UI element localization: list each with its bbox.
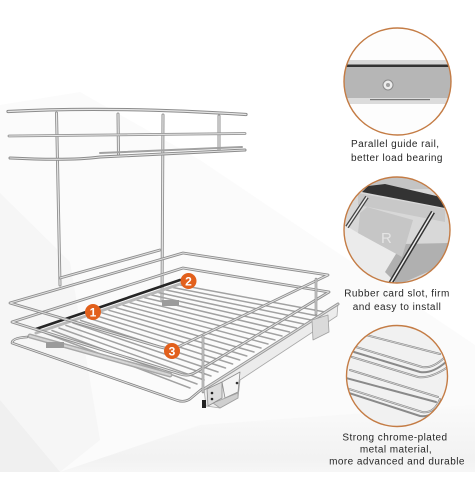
badge 2 [180, 273, 196, 289]
detail circle: rubber card slot [343, 176, 451, 284]
left guide rail [30, 280, 180, 375]
badge 3 [164, 343, 180, 359]
badge 3: 3 [169, 344, 176, 358]
badge 1 [85, 304, 101, 320]
upper shelf posts [56, 113, 219, 300]
detail circle: chrome-plated wires [346, 326, 448, 426]
lower basket [10, 250, 338, 408]
detail circle: rubber card slot: R [381, 230, 392, 247]
caption: guide rail: better load bearing [351, 153, 443, 164]
upper shelf rails [8, 109, 246, 159]
caption: chrome-plated metal: more advanced and durable [329, 456, 465, 468]
basket middle rim [12, 268, 329, 375]
basket bottom rim [12, 337, 202, 401]
caption: rubber card slot: Rubber card slot, firm [344, 288, 450, 300]
detail circle: guide rail [340, 28, 455, 135]
badge 1: 1 [90, 306, 97, 320]
right slide rail [202, 303, 338, 408]
upper shelf [8, 109, 246, 300]
basket top rim [10, 253, 328, 348]
caption: chrome-plated metal: metal material, [360, 444, 432, 456]
badge 2: 2 [185, 274, 192, 288]
basket front posts [203, 279, 316, 392]
caption: chrome-plated metal: Strong chrome-plated [342, 432, 448, 444]
caption: rubber card slot: and easy to install [353, 302, 441, 313]
basket floor slats [45, 285, 325, 388]
caption: guide rail: Parallel guide rail, [351, 139, 440, 150]
basket diagonal back bar [60, 250, 160, 278]
